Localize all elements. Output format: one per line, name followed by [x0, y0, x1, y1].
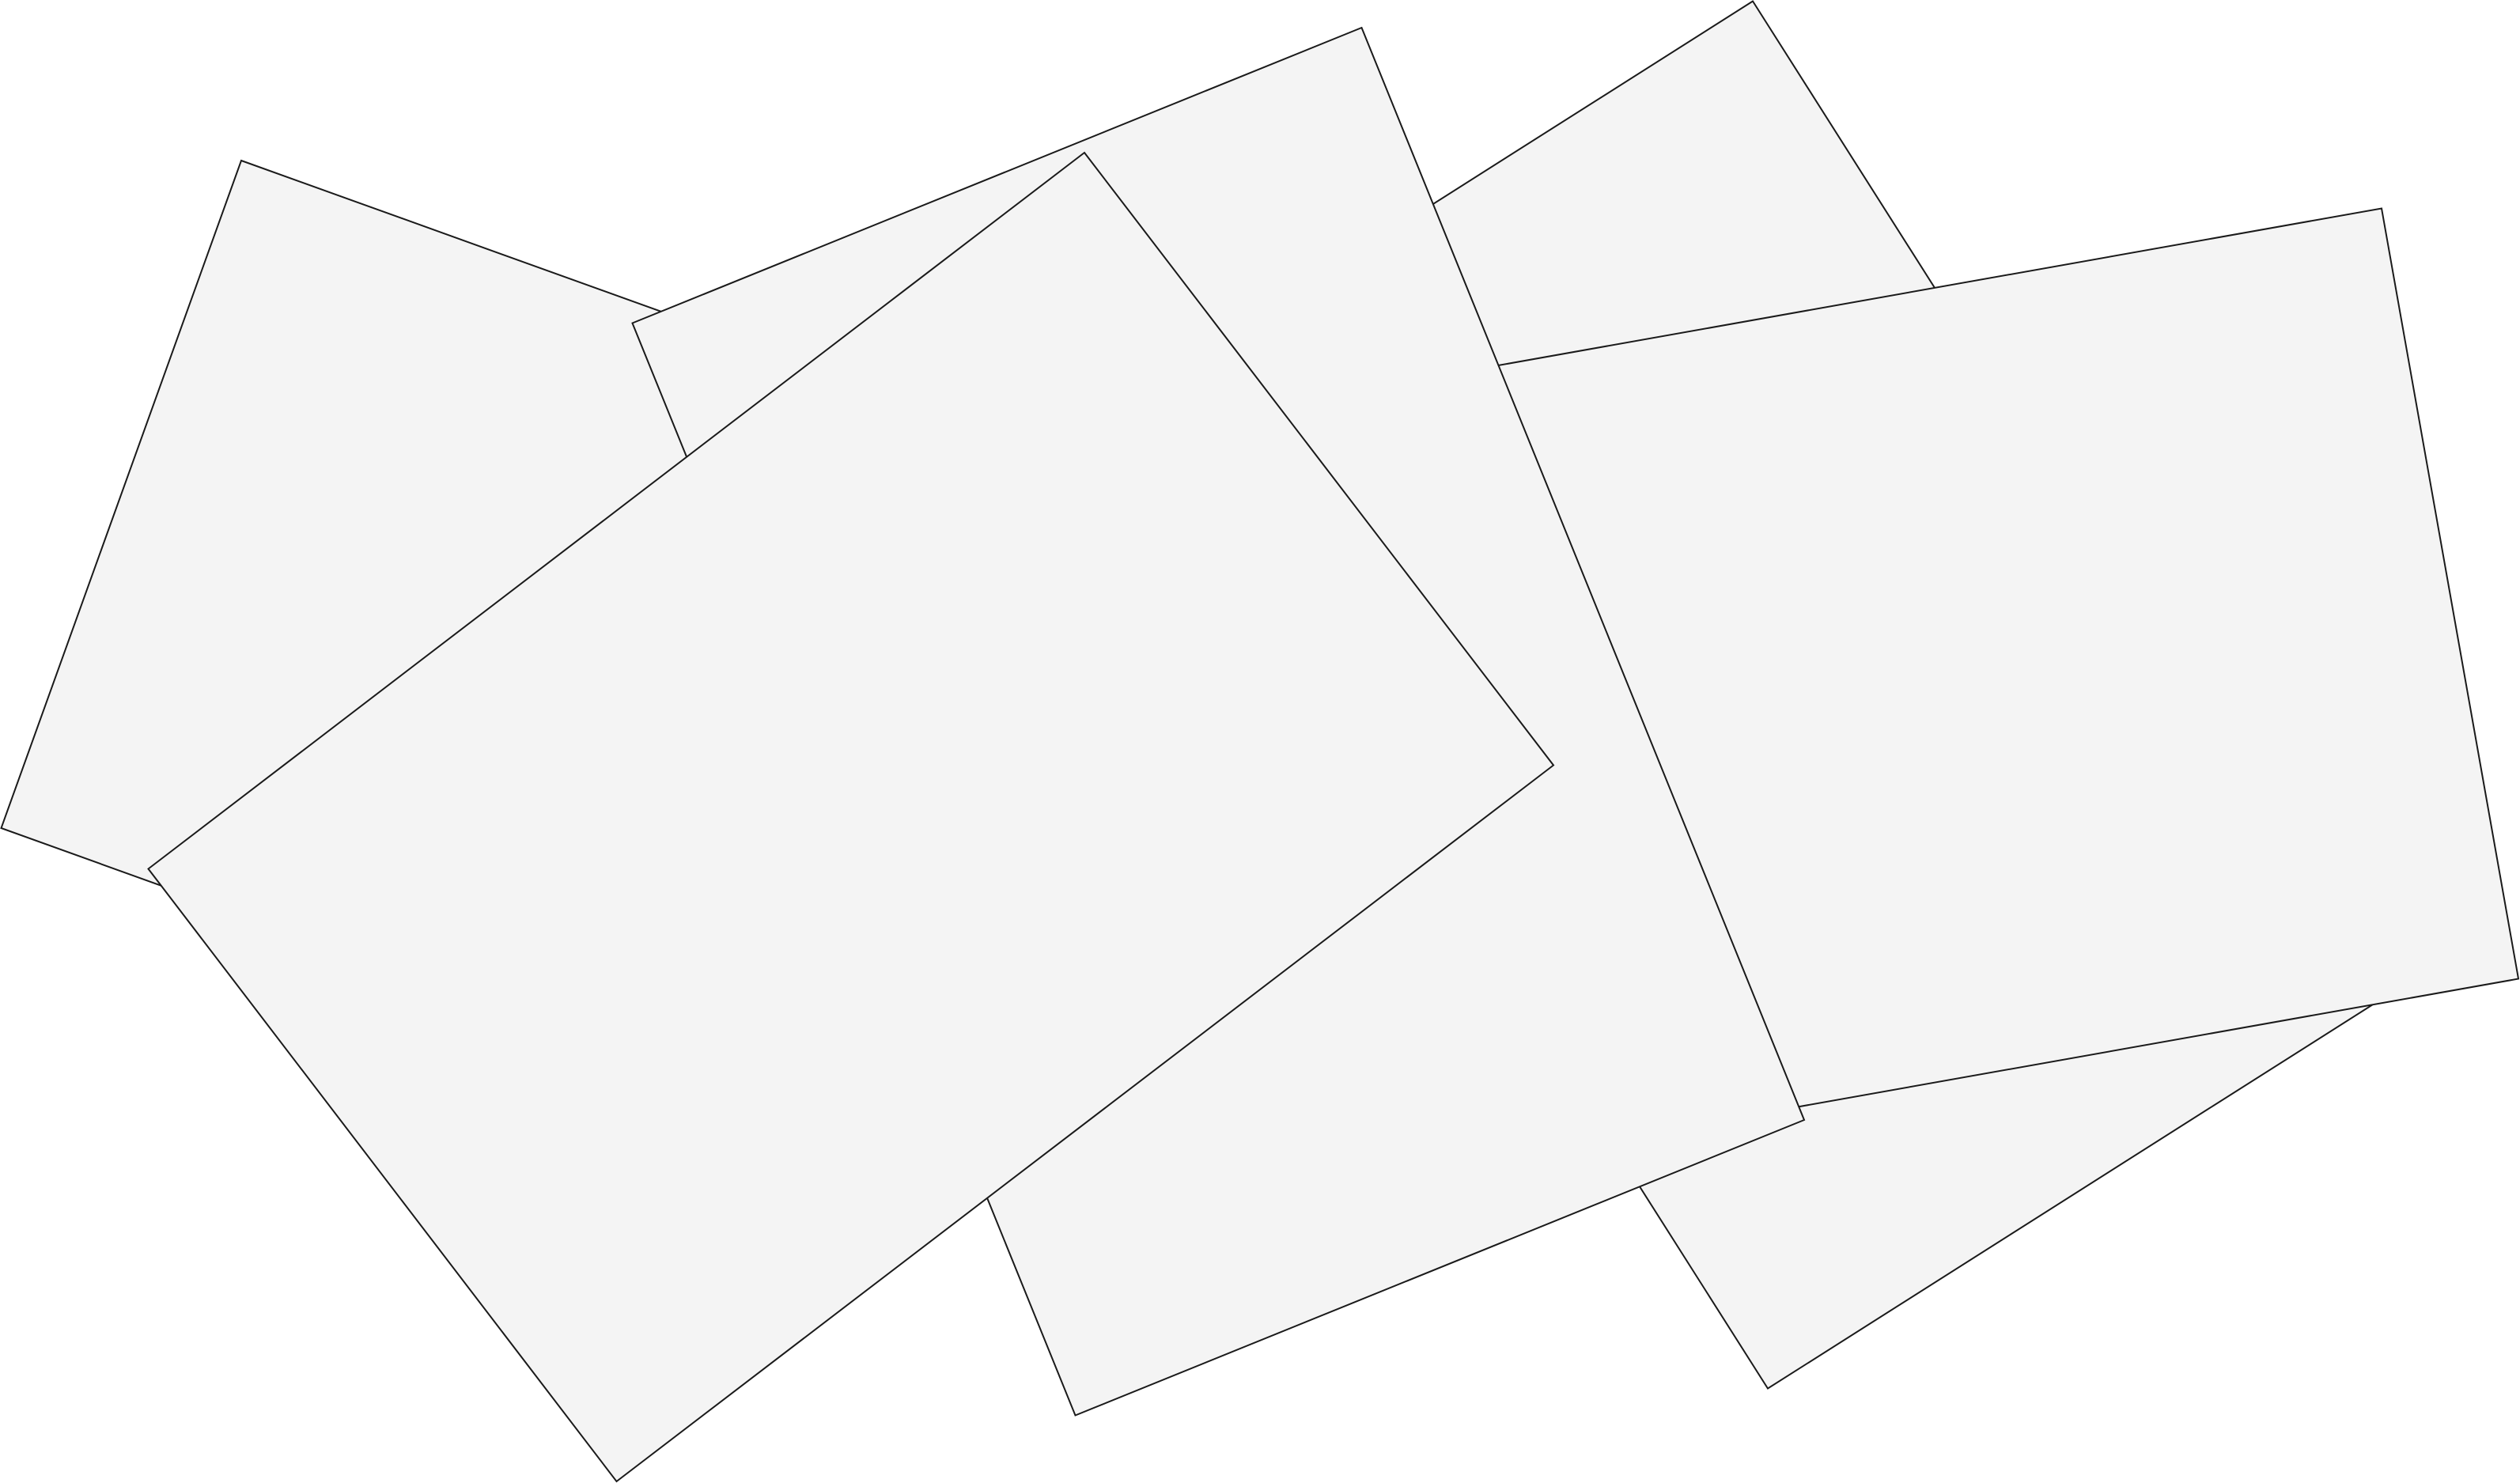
panel: left back sheet [2, 161, 985, 1095]
panel: front sheet [149, 153, 1553, 1481]
panel: centre sheet [633, 28, 1804, 1416]
panel: upper right back sheet [1136, 2, 2385, 1389]
panel: right sheet [1369, 209, 2518, 1159]
